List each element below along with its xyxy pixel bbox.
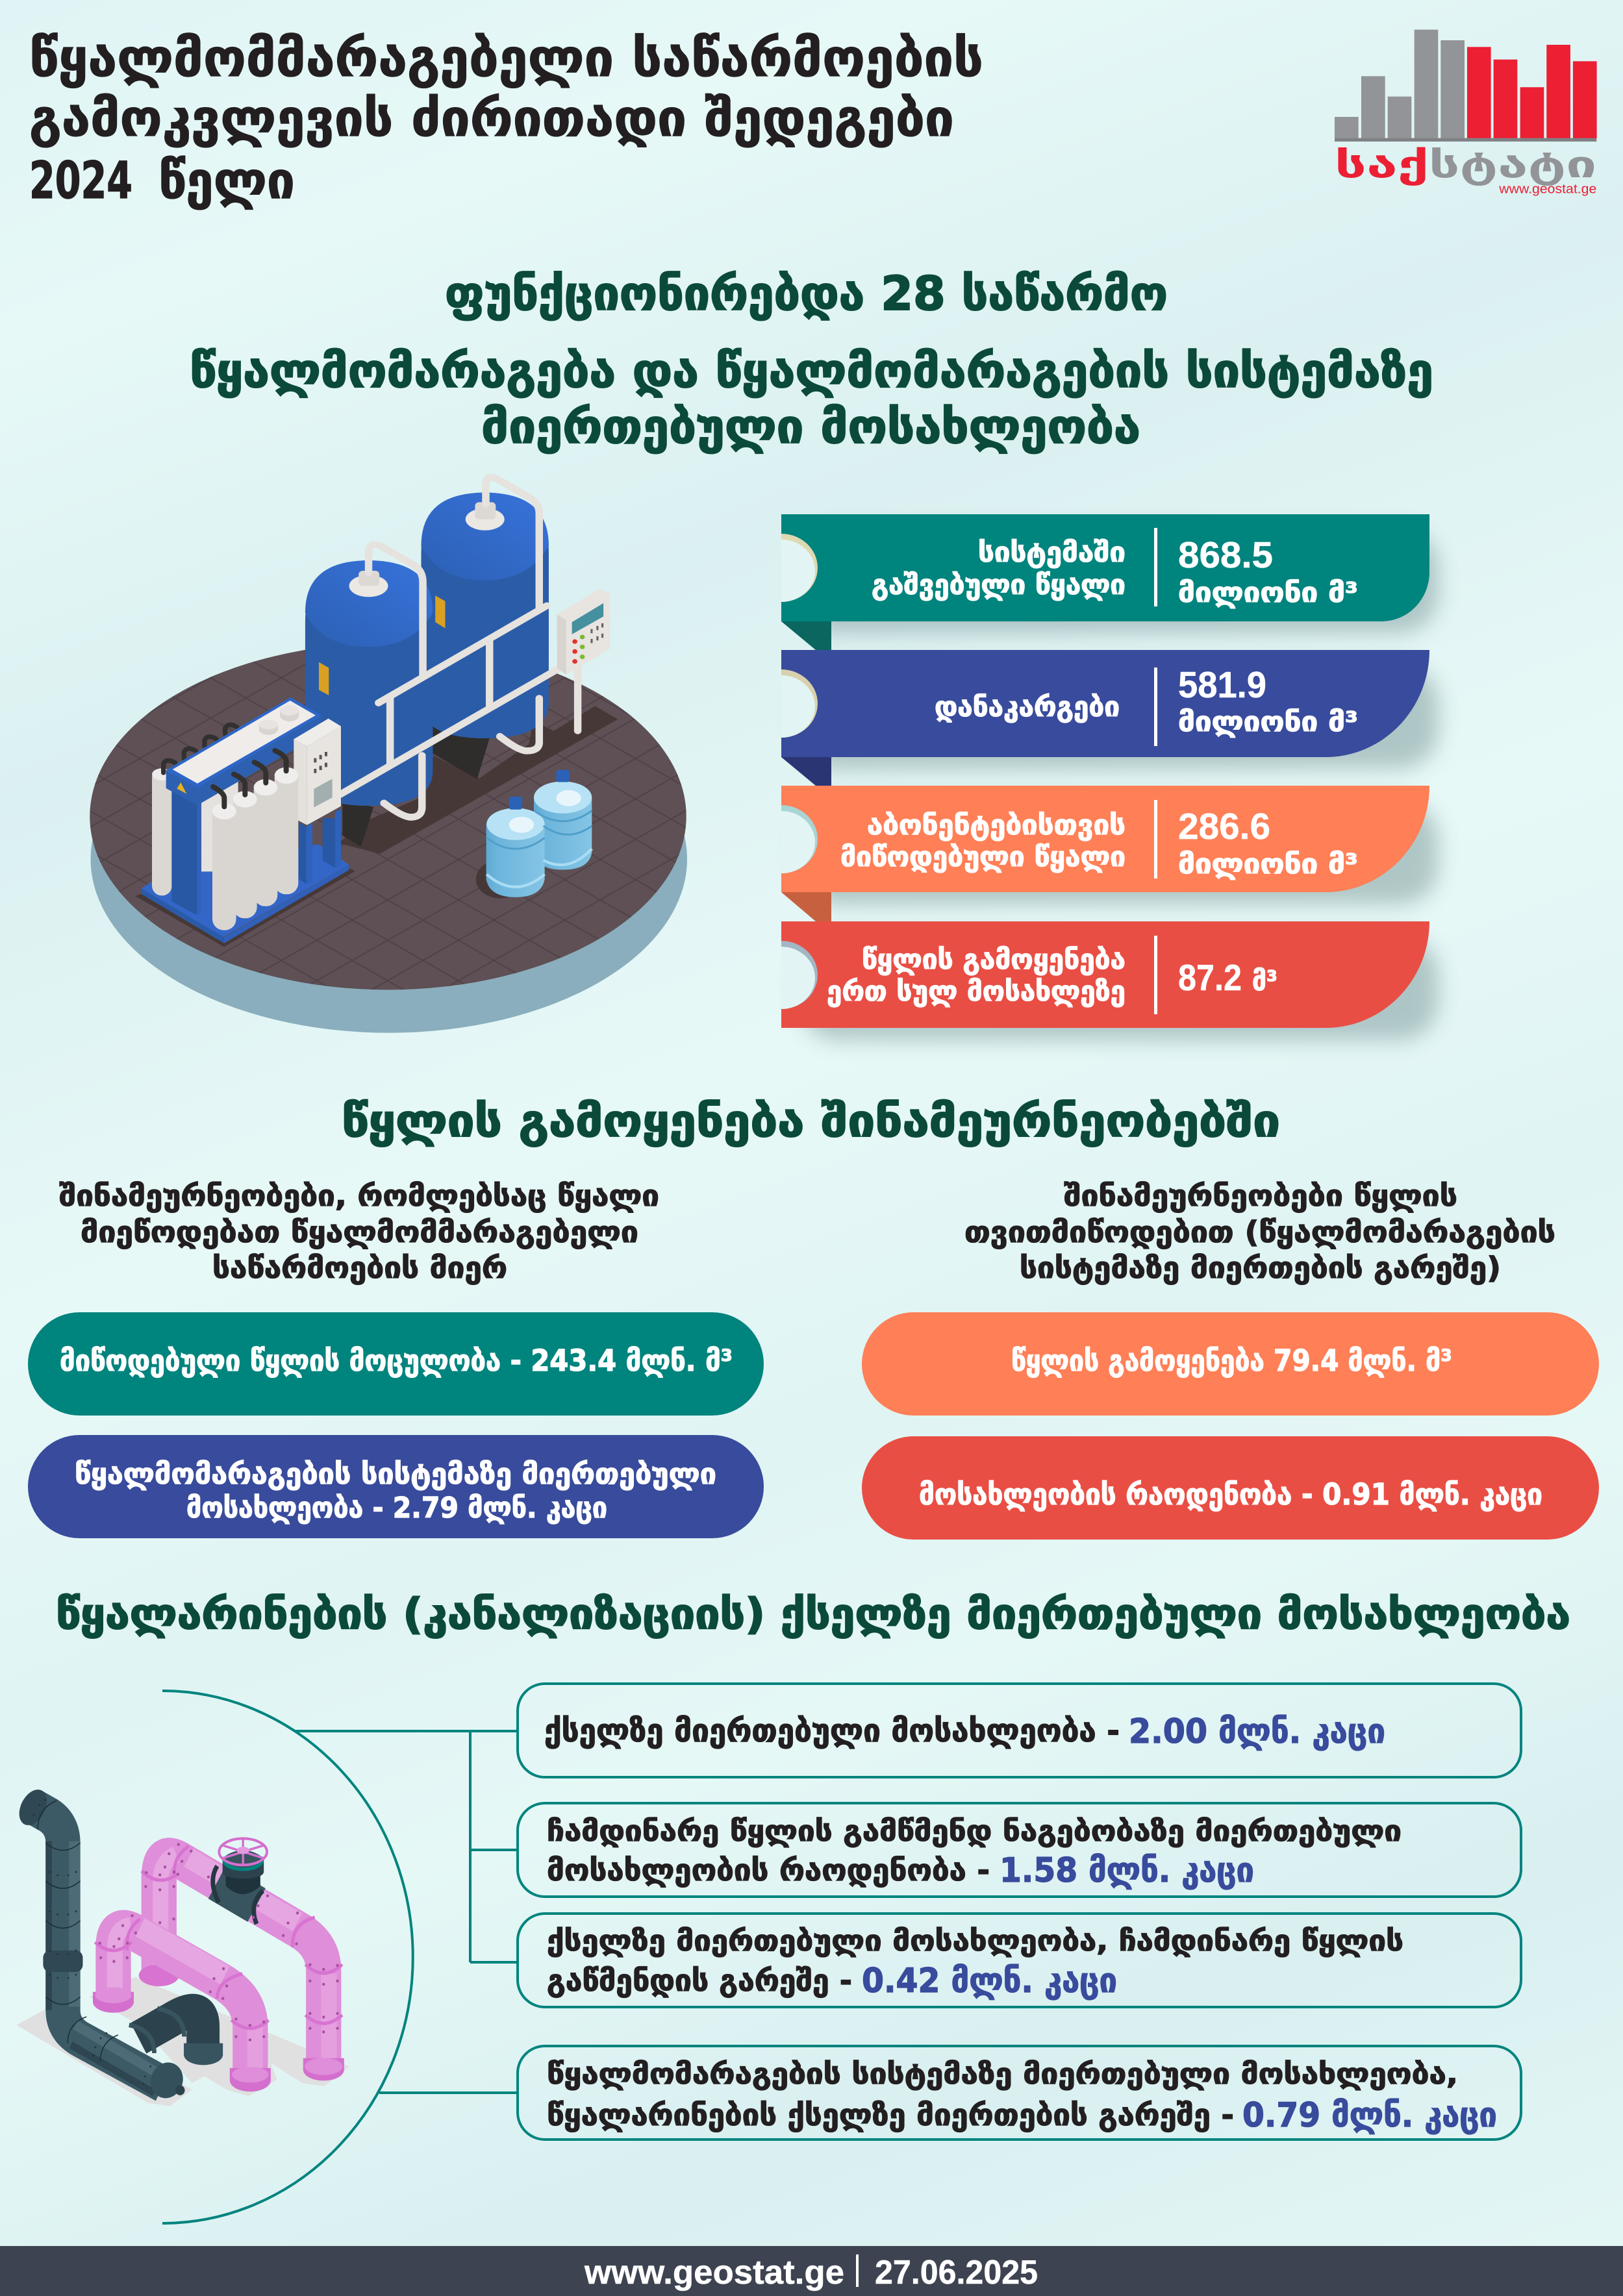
valve <box>213 1838 267 1924</box>
control panel <box>557 589 610 675</box>
box: water supply without sewerage: წყალარინების ქსელზე მიერთების გარეშე - <box>547 2097 1234 2132</box>
panel: water use per capita: ერთ სულ მოსახლეზე <box>827 975 1126 1007</box>
box: connected to network: ქსელზე მიერთებული მოსახლეობა - <box>544 1713 1120 1749</box>
footer <box>0 2246 1623 2296</box>
box: connected without treatment: გაწმენდის გარეშე - <box>547 1963 852 1998</box>
pill: supplied water volume: მიწოდებული წყლის მოცულობა - 243.4 მლნ. მ³ <box>60 1343 733 1378</box>
box: connected without treatment: ქსელზე მიერთებული მოსახლეობა, ჩამდინარე წყლის <box>547 1925 1403 1958</box>
box: connected to wastewater treatment plant: 1.58 მლნ. კაცი <box>1000 1851 1254 1890</box>
panel: water supplied to the system: სისტემაში <box>978 536 1126 568</box>
panel: water supplied to the system: 868.5 <box>1178 534 1273 576</box>
panel: water supplied to the system <box>781 514 1439 650</box>
panel: water use per capita: 87.2 <box>1178 957 1242 999</box>
heading: sewerage network: წყალარინების (კანალიზაციის) ქსელზე მიერთებული მოსახლეობა <box>56 1590 1570 1639</box>
panel: water use per capita: მ³ <box>1252 965 1277 997</box>
heading: water use in households: წყლის გამოყენება შინამეურნეობებში <box>342 1096 1280 1147</box>
subheading: households supplied by enterprises: შინამეურნეობები, რომლებსაც წყალი <box>59 1179 659 1213</box>
logo: Geostat: სტატი <box>1429 144 1596 186</box>
logo: Geostat: საქ <box>1335 144 1429 186</box>
box: connected to wastewater treatment plant: მოსახლეობის რაოდენობა - <box>547 1853 990 1888</box>
subheading: self-supplied households: თვითმიწოდებით (წყალმომარაგების <box>964 1215 1555 1249</box>
title: 2024 <box>29 152 132 210</box>
title: წყალმომმარაგებელი საწარმოების <box>29 28 983 88</box>
pill: self-supplied population <box>862 1436 1599 1540</box>
panel: water losses: მილიონი მ³ <box>1178 706 1358 738</box>
box: water supply without sewerage: 0.79 მლნ. კაცი <box>1242 2096 1497 2135</box>
pill: connected population <box>28 1435 764 1538</box>
back pink pipe <box>139 1846 344 2080</box>
logo: Geostat: www.geostat.ge <box>1498 181 1596 196</box>
panel: water supplied to subscribers: 286.6 <box>1178 806 1270 847</box>
pill: self-supplied water use <box>862 1312 1599 1416</box>
panel: water supplied to subscribers: მილიონი მ³ <box>1178 848 1358 880</box>
illustration: pipes <box>14 1784 349 2106</box>
heading: water supply and connected population: მიერთებული მოსახლეობა <box>481 399 1140 454</box>
footer: www.geostat.ge <box>584 2254 844 2291</box>
logo: Geostat <box>1335 30 1597 196</box>
panel: water supplied to subscribers <box>781 786 1439 921</box>
subheading: self-supplied households: სისტემაზე მიერთების გარეშე) <box>1020 1251 1501 1285</box>
box: connected to network: 2.00 მლნ. კაცი <box>1129 1712 1385 1751</box>
subheading: self-supplied households: შინამეურნეობები წყლის <box>1064 1179 1457 1213</box>
subheading: households supplied by enterprises <box>59 1179 659 1285</box>
panel: water supplied to the system: გაშვებული წყალი <box>872 569 1126 601</box>
panel: water losses: 581.9 <box>1178 664 1266 706</box>
box: connected to network <box>518 1684 1521 1777</box>
box: water supply without sewerage: წყალმომარაგების სისტემაზე მიერთებული მოსახლეობა, <box>547 2058 1458 2091</box>
filtration unit <box>135 697 355 947</box>
heading: water supply and connected population <box>190 343 1433 454</box>
subheading: self-supplied households <box>964 1179 1555 1285</box>
illustration: water treatment plant <box>90 477 687 1033</box>
panel: water use per capita <box>781 921 1439 1040</box>
title: გამოკვლევის ძირითადი შედეგები <box>29 90 954 148</box>
pink pipe rivets <box>100 1845 338 2040</box>
title <box>29 28 983 210</box>
panel: water losses <box>781 650 1439 786</box>
dark pipe <box>14 1784 189 2104</box>
subheading: households supplied by enterprises: საწარმოების მიერ <box>212 1251 507 1285</box>
footer: 27.06.2025 <box>875 2254 1038 2291</box>
box: connected to wastewater treatment plant: ჩამდინარე წყლის გამწმენდ ნაგებობაზე მიერთებული <box>547 1815 1402 1848</box>
pill: supplied water volume <box>28 1312 764 1416</box>
box: connected without treatment <box>518 1914 1521 2007</box>
pill: self-supplied water use: წყლის გამოყენება 79.4 მლნ. მ³ <box>1011 1343 1452 1378</box>
pipework <box>340 477 578 817</box>
heading: water supply and connected population: წყალმომარაგება და წყალმომარაგების სისტემაზე <box>190 343 1433 398</box>
panel: water supplied to subscribers: მიწოდებული წყალი <box>840 841 1126 873</box>
water bottles <box>476 770 592 899</box>
pill: self-supplied population: მოსახლეობის რაოდენობა - 0.91 მლნ. კაცი <box>919 1477 1542 1512</box>
panel: water supplied to subscribers: აბონენტებისთვის <box>867 809 1126 841</box>
front pink pipe <box>93 1919 271 2091</box>
box: connected to wastewater treatment plant <box>518 1803 1521 1897</box>
box: connected without treatment: 0.42 მლნ. კაცი <box>862 1962 1117 2001</box>
title: წელი <box>158 152 295 210</box>
pill: connected population: წყალმომარაგების სისტემაზე მიერთებული <box>75 1458 716 1491</box>
dark elbow <box>129 2008 223 2065</box>
panel: water losses: დანაკარგები <box>935 691 1120 723</box>
box: water supply without sewerage <box>518 2046 1521 2140</box>
connector lines <box>162 1691 518 2223</box>
left tank <box>305 560 433 847</box>
subheading: households supplied by enterprises: მიეწოდებათ წყალმომმარაგებელი <box>81 1215 638 1249</box>
panel: water use per capita: წყლის გამოყენება <box>862 943 1126 975</box>
right tank <box>421 493 549 779</box>
pill: connected population: მოსახლეობა - 2.79 მლნ. კაცი <box>186 1491 607 1525</box>
panel: water supplied to the system: მილიონი მ³ <box>1178 577 1358 608</box>
heading: functioning enterprises: ფუნქციონირებდა 28 საწარმო <box>445 266 1168 321</box>
